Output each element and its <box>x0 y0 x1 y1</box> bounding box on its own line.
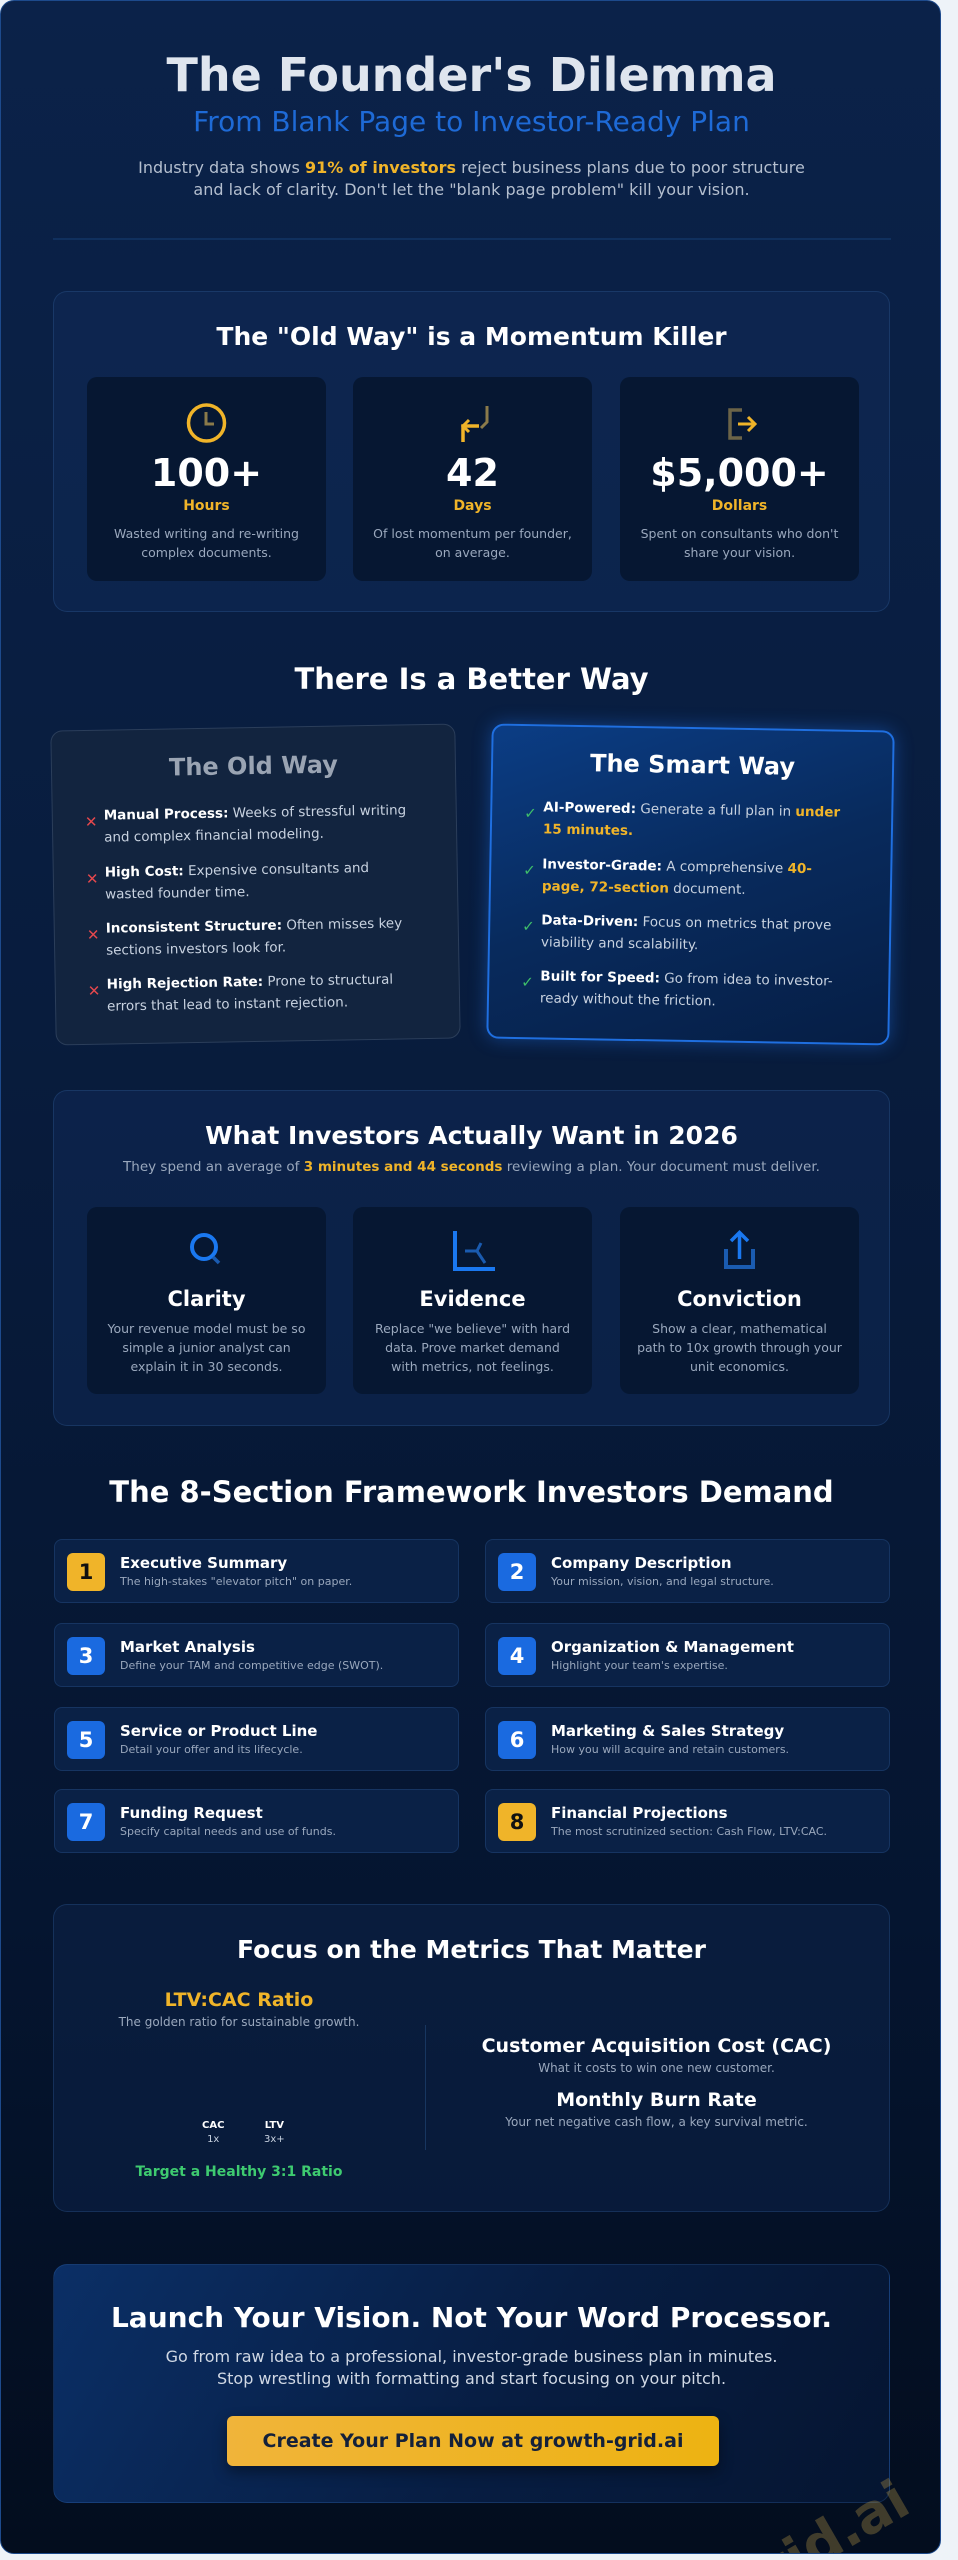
section 3 <box>54 1623 459 1687</box>
cac and burn block: Customer Acquisition Cost (CAC) <box>482 2035 831 2057</box>
section 5: Detail your offer and its lifecycle. <box>120 1743 303 1756</box>
icon: clock <box>186 403 226 443</box>
chart labels <box>202 2120 224 2145</box>
list: Data-Driven: Focus on metrics that prove viability and scalability. <box>541 912 832 953</box>
framework grid <box>54 1539 890 1853</box>
list: Built for Speed: Go from idea to investor-ready without the friction. <box>540 968 833 1009</box>
stat card: hours <box>87 377 326 581</box>
section 2: Company Description <box>551 1554 732 1572</box>
cac and burn block: Monthly Burn Rate <box>556 2089 757 2111</box>
panel: old way: ✕ <box>86 870 99 888</box>
button <box>227 2416 719 2466</box>
icon: search <box>190 1233 220 1264</box>
section 5: Service or Product Line <box>120 1722 317 1740</box>
icon: upload <box>724 1230 755 1269</box>
section 6: How you will acquire and retain customers. <box>551 1743 789 1756</box>
panel: what investors want <box>53 1090 890 1426</box>
heading: better way: There Is a Better Way <box>294 662 649 696</box>
chart labels: 1x <box>207 2134 219 2145</box>
section 2: 2 <box>510 1560 524 1584</box>
stat card: hours: Wasted writing and re-writing complex documents. <box>114 526 299 560</box>
panel: metrics <box>53 1904 890 2212</box>
panel: smart way: ✓ <box>521 973 534 991</box>
heading: The Old Way <box>169 751 338 781</box>
list: High Cost: Expensive consultants and wasted founder time. <box>105 860 369 903</box>
ltv cac block: The golden ratio for sustainable growth. <box>119 2015 359 2029</box>
ltv cac block: LTV <box>265 2120 284 2131</box>
section 7 <box>54 1789 459 1853</box>
intro text: Industry data shows 91% of investors reject business plans due to poor structure and lack of clarity. Don't let the "blank page problem" kill your vision. <box>138 158 805 199</box>
panel: old way momentum killer <box>53 291 890 612</box>
card: evidence: Evidence <box>419 1287 526 1311</box>
ltv cac block: 3x+ <box>264 2134 285 2145</box>
title: The Founder's Dilemma <box>166 48 777 102</box>
section 3: Define your TAM and competitive edge (SWOT). <box>120 1659 383 1672</box>
section 4: Organization & Management <box>551 1638 794 1656</box>
heading: The Smart Way <box>590 749 795 781</box>
stat card: dollars: Spent on consultants who don't share your vision. <box>641 526 838 560</box>
panel: old way: ✕ <box>87 926 100 944</box>
card: conviction: Conviction <box>677 1287 802 1311</box>
icon: turn arrow <box>461 406 488 442</box>
stat card: dollars: Dollars <box>712 498 767 514</box>
stat card: days <box>353 377 592 581</box>
card: clarity <box>87 1207 326 1394</box>
heading: The "Old Way" is a Momentum Killer <box>216 322 727 351</box>
ltv cac block <box>118 1989 359 2180</box>
list: Manual Process: Weeks of stressful writing and complex financial modeling. <box>104 802 406 846</box>
section 5 <box>54 1707 459 1771</box>
heading: What Investors Actually Want in 2026 <box>205 1121 738 1150</box>
heading: Launch Your Vision. Not Your Word Processor. <box>111 2301 832 2334</box>
panel: old way: ✕ <box>85 813 98 831</box>
stat card: hours: 100+ <box>151 451 262 495</box>
stat card: dollars <box>620 377 859 581</box>
chart labels: CAC <box>202 2120 224 2131</box>
subtitle: From Blank Page to Investor-Ready Plan <box>193 105 750 138</box>
list: Inconsistent Structure: Often misses key sections investors look for. <box>106 915 402 959</box>
cac and burn block: Your net negative cash flow, a key survival metric. <box>505 2115 808 2129</box>
button: Create Your Plan Now at growth-grid.ai <box>263 2430 683 2452</box>
section 1: 1 <box>79 1560 93 1584</box>
section 8: Financial Projections <box>551 1804 728 1822</box>
section 8: The most scrutinized section: Cash Flow, LTV:CAC. <box>551 1825 827 1838</box>
stat card: days: Days <box>453 498 492 514</box>
card: conviction <box>620 1207 859 1394</box>
section 2 <box>485 1539 890 1603</box>
section 4: Highlight your team's expertise. <box>551 1659 728 1672</box>
text: Stop wrestling with formatting and start focusing on your pitch. <box>217 2369 726 2388</box>
stat card: dollars: $5,000+ <box>650 451 829 495</box>
icon: chart <box>453 1231 495 1271</box>
section 6 <box>485 1707 890 1771</box>
section 7: Funding Request <box>120 1804 263 1822</box>
subtitle: They spend an average of 3 minutes and 44 seconds reviewing a plan. Your document must deliver. <box>123 1159 820 1175</box>
section 1: Executive Summary <box>120 1554 287 1572</box>
section 6: 6 <box>510 1728 524 1752</box>
section 2: Your mission, vision, and legal structure. <box>551 1575 774 1588</box>
section 5: 5 <box>79 1728 93 1752</box>
card: evidence: Replace "we believe" with hard data. Prove market demand with metrics, not feelings. <box>375 1321 570 1374</box>
card: clarity: Clarity <box>167 1287 246 1311</box>
card: evidence <box>353 1207 592 1394</box>
panel: old way <box>50 723 461 1046</box>
list <box>85 802 406 1015</box>
section 8: 8 <box>510 1810 524 1834</box>
stat card: days: Of lost momentum per founder, on average. <box>373 526 572 560</box>
text <box>166 2347 777 2388</box>
section 3: 3 <box>79 1644 93 1668</box>
section 1: The high-stakes "elevator pitch" on paper. <box>120 1575 352 1588</box>
card: clarity: Your revenue model must be so simple a junior analyst can explain it in 30 seconds. <box>108 1321 305 1374</box>
section 4: 4 <box>510 1644 524 1668</box>
text: Go from raw idea to a professional, investor-grade business plan in minutes. <box>166 2347 777 2366</box>
ltv cac block: LTV:CAC Ratio <box>165 1989 313 2011</box>
panel: smart way: ✓ <box>524 804 537 822</box>
icon: exit <box>728 408 757 440</box>
cac and burn block: What it costs to win one new customer. <box>538 2061 775 2075</box>
section 6: Marketing & Sales Strategy <box>551 1722 784 1740</box>
section 8 <box>485 1789 890 1853</box>
heading: Focus on the Metrics That Matter <box>237 1935 706 1964</box>
section 1 <box>54 1539 459 1603</box>
list: High Rejection Rate: Prone to structural errors that lead to instant rejection. <box>107 972 393 1015</box>
stat card: days: 42 <box>446 451 499 495</box>
section 7: 7 <box>79 1810 93 1834</box>
cac and burn block <box>482 2035 831 2129</box>
section 4 <box>485 1623 890 1687</box>
list <box>521 799 840 1009</box>
panel: smart way: ✓ <box>522 917 535 935</box>
stat card: hours: Hours <box>183 498 230 514</box>
section 3: Market Analysis <box>120 1638 255 1656</box>
panel: call to action <box>53 2264 890 2503</box>
panel: smart way <box>486 724 895 1045</box>
panel: old way: ✕ <box>88 982 101 1000</box>
heading: framework: The 8-Section Framework Investors Demand <box>109 1475 834 1509</box>
list: Investor-Grade: A comprehensive 40-page, 72-section document. <box>542 856 812 898</box>
list: AI-Powered: Generate a full plan in under 15 minutes. <box>543 799 840 839</box>
ltv cac block: Target a Healthy 3:1 Ratio <box>136 2164 342 2180</box>
card: conviction: Show a clear, mathematical path to 10x growth through your unit economics. <box>637 1321 842 1374</box>
section 7: Specify capital needs and use of funds. <box>120 1825 336 1838</box>
panel: smart way: ✓ <box>523 861 536 879</box>
